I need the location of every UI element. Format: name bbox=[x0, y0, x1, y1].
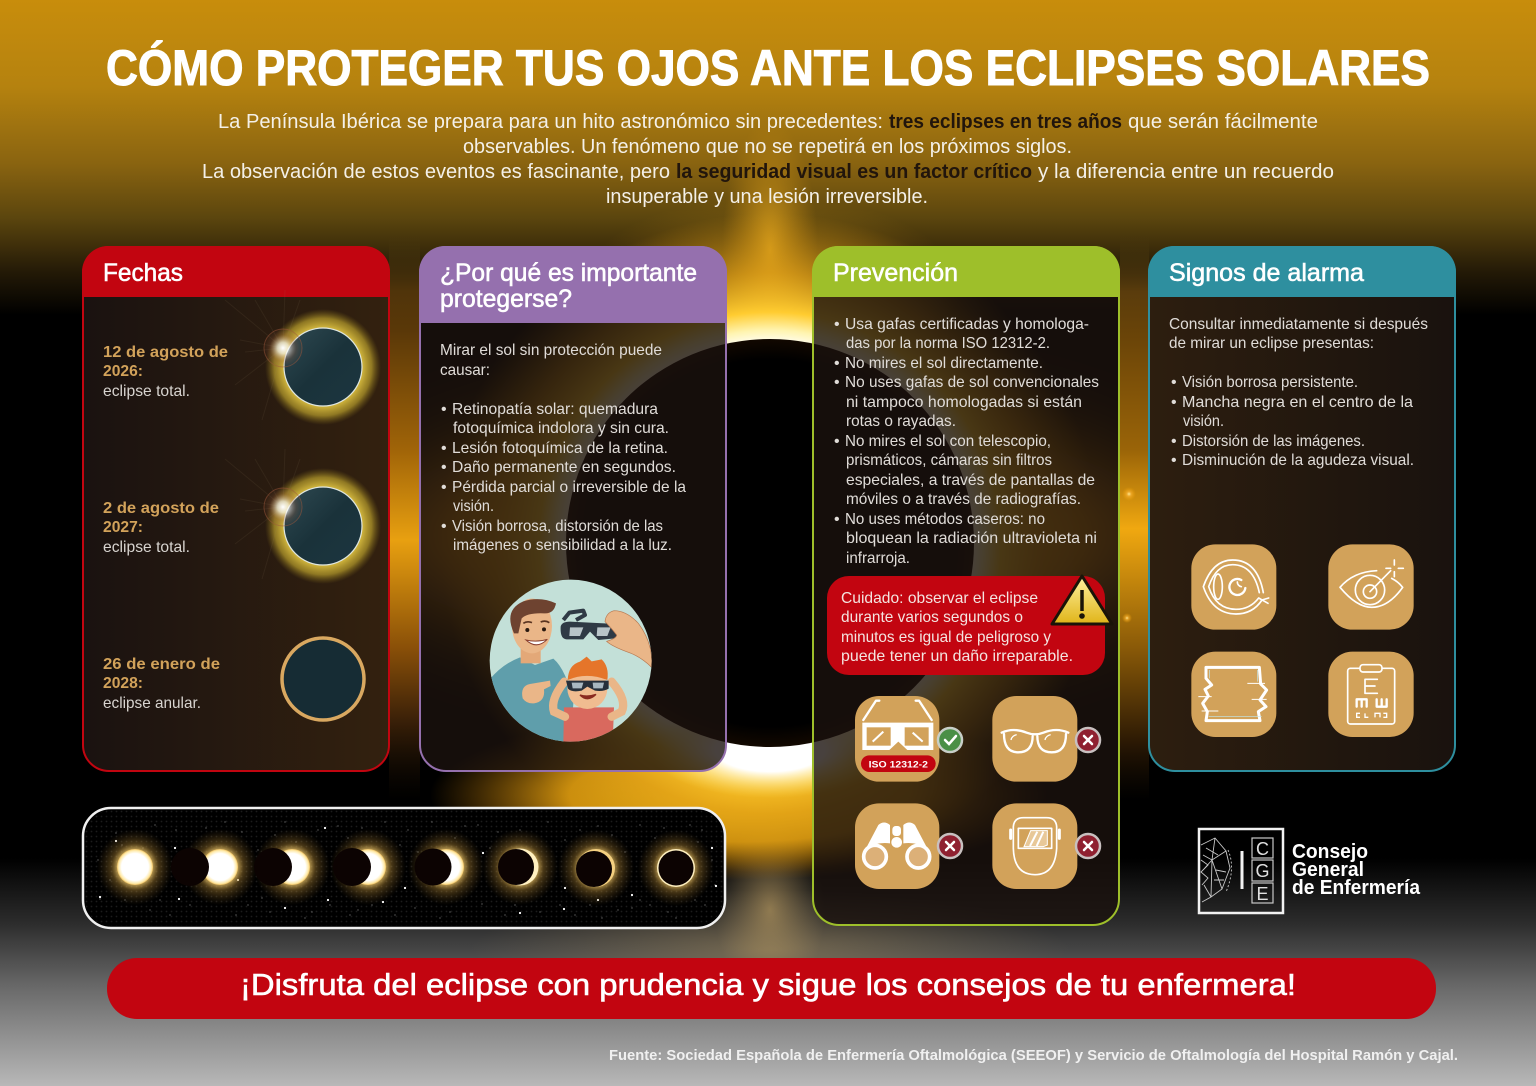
body text: síntomas: • bbox=[1171, 394, 1177, 411]
phase 7 bbox=[558, 830, 634, 906]
date: 2 agosto 2027: eclipse total. bbox=[103, 539, 190, 556]
body text: síntomas: Disminución de la agudeza visual. bbox=[1182, 452, 1414, 469]
body text: riesgos: causar: bbox=[440, 362, 490, 379]
body text: riesgos: Pérdida parcial o irreversible de la bbox=[452, 479, 686, 496]
logo emblem bbox=[1201, 838, 1232, 902]
body text: consejos: • bbox=[834, 374, 840, 391]
body text: síntomas: Visión borrosa persistente. bbox=[1182, 374, 1358, 391]
panel: fechas bbox=[82, 246, 390, 771]
phase 3 bbox=[254, 829, 330, 905]
logo: Consejo General de Enfermería: E bbox=[1256, 884, 1269, 904]
badge: correct bbox=[938, 728, 962, 752]
phase 5 bbox=[408, 829, 484, 905]
body text: consejos: prismáticos, cámaras sin filtros bbox=[846, 452, 1052, 469]
body text: consejos: • bbox=[834, 355, 840, 372]
callout: cuidado: minutos es igual de peligroso y bbox=[841, 629, 1051, 646]
body text: síntomas bbox=[1169, 316, 1428, 469]
eclipse icon: total 2027 bbox=[225, 449, 381, 584]
logo: Consejo General de Enfermería bbox=[1199, 829, 1421, 913]
logo letters bbox=[1252, 838, 1273, 903]
body text: riesgos: • bbox=[441, 518, 447, 535]
date: 2 agosto 2027: 2 de agosto de bbox=[103, 500, 219, 517]
body text: riesgos: imágenes o sensibilidad a la luz. bbox=[453, 537, 672, 554]
panel: prevención bbox=[812, 246, 1120, 925]
icon: welding mask bbox=[992, 803, 1077, 889]
banner: closing message: ¡Disfruta del eclipse con prudencia y sigue los consejos de tu enfermera! bbox=[240, 967, 1296, 1002]
body text: consejos: • bbox=[834, 433, 840, 450]
eclipse phases strip bbox=[83, 808, 725, 928]
phase 2 bbox=[171, 829, 258, 905]
intro text: La observación de estos eventos es fascinante, pero bbox=[202, 161, 670, 183]
date: 2 agosto 2027 bbox=[103, 500, 219, 556]
body text: riesgos: Visión borrosa, distorsión de las bbox=[452, 518, 663, 535]
badge: wrong binoculars bbox=[938, 834, 962, 858]
body text: consejos: ni tampoco homologadas si están bbox=[846, 394, 1082, 411]
header: por qué: ¿Por qué es importante bbox=[440, 259, 697, 287]
intro text: observables. Un fenómeno que no se repetirá en los próximos siglos. bbox=[463, 136, 1072, 158]
body text: riesgos: • bbox=[441, 440, 447, 457]
date: 2 agosto 2027: 2027: bbox=[103, 519, 143, 536]
icon: certified eclipse glasses: ISO 12312-2 bbox=[869, 759, 928, 769]
banner: closing message bbox=[107, 958, 1436, 1019]
icon: eye with laser bbox=[1328, 544, 1414, 630]
callout: cuidado: puede tener un daño irreparable. bbox=[841, 648, 1073, 665]
date: 12 agosto 2026 bbox=[103, 344, 228, 400]
body text: síntomas: visión. bbox=[1183, 413, 1224, 430]
header: por qué: protegerse? bbox=[440, 285, 572, 313]
panel: por qué protegerse bbox=[419, 246, 727, 771]
intro text: insuperable y una lesión irreversible. bbox=[606, 186, 928, 208]
body text: síntomas: • bbox=[1171, 433, 1177, 450]
body text: síntomas: Mancha negra en el centro de la bbox=[1182, 394, 1413, 411]
source note: Fuente: Sociedad Española de Enfermería Oftalmológica (SEEOF) y Servicio de Oftalmología del Hospital Ramón y Cajal. bbox=[609, 1048, 1458, 1064]
body text: consejos: móviles o a través de radiografías. bbox=[846, 491, 1081, 508]
body text: consejos: No uses gafas de sol convencionales bbox=[845, 374, 1099, 391]
header: fechas bbox=[82, 246, 390, 297]
eclipse icon: total 2026 bbox=[225, 290, 381, 425]
icon: certified eclipse glasses bbox=[855, 696, 939, 782]
icon: sunglasses bbox=[992, 696, 1077, 782]
intro text: la seguridad visual es un factor crítico bbox=[676, 161, 1032, 183]
illustration: father and child with eclipse glasses bbox=[487, 580, 652, 750]
body text: riesgos bbox=[440, 342, 686, 554]
body text: síntomas: • bbox=[1171, 452, 1177, 469]
body text: consejos: • bbox=[834, 316, 840, 333]
body text: consejos: No mires el sol con telescopio, bbox=[845, 433, 1051, 450]
body text: consejos: No mires el sol directamente. bbox=[845, 355, 1043, 372]
phase 4 bbox=[330, 829, 406, 905]
body text: consejos: Usa gafas certificadas y homologa- bbox=[845, 316, 1089, 333]
header: signos: Signos de alarma bbox=[1169, 259, 1364, 287]
body text: consejos: especiales, a través de pantallas de bbox=[846, 472, 1095, 489]
date: 12 agosto 2026: 12 de agosto de bbox=[103, 344, 228, 361]
body text: consejos: rotas o rayadas. bbox=[846, 413, 956, 430]
phase 1 bbox=[97, 829, 173, 905]
icon: distorted image bbox=[1191, 652, 1276, 737]
intro text: tres eclipses en tres años bbox=[889, 111, 1122, 133]
intro text: que serán fácilmente bbox=[1128, 111, 1318, 133]
badge: wrong sunglasses bbox=[1076, 728, 1100, 752]
icon: eye anatomy bbox=[1191, 544, 1276, 630]
date: 26 enero 2028: 26 de enero de bbox=[103, 656, 220, 673]
logo: Consejo General de Enfermería: de Enfermería bbox=[1292, 877, 1421, 899]
logo: Consejo General de Enfermería: Consejo bbox=[1292, 841, 1368, 863]
date: 26 enero 2028: eclipse anular. bbox=[103, 695, 201, 712]
header: por qué bbox=[419, 246, 727, 323]
badge: wrong mask bbox=[1076, 834, 1100, 858]
body text: síntomas: Consultar inmediatamente si después bbox=[1169, 316, 1428, 333]
intro text bbox=[202, 111, 1334, 208]
body text: consejos: bloquean la radiación ultravioleta ni bbox=[846, 530, 1097, 547]
header: signos bbox=[1148, 246, 1456, 297]
body text: consejos: das por la norma ISO 12312-2. bbox=[846, 335, 1050, 352]
intro text: La Península Ibérica se prepara para un hito astronómico sin precedentes: bbox=[218, 111, 883, 133]
logo: Consejo General de Enfermería: General bbox=[1292, 859, 1364, 881]
body text: riesgos: Mirar el sol sin protección puede bbox=[440, 342, 662, 359]
logo: Consejo General de Enfermería: C bbox=[1256, 839, 1269, 859]
body text: síntomas: Distorsión de las imágenes. bbox=[1182, 433, 1365, 450]
date: 26 enero 2028 bbox=[103, 656, 220, 712]
eclipse icon: anular 2028 bbox=[282, 638, 364, 720]
logo: Consejo General de Enfermería: G bbox=[1255, 861, 1270, 881]
header: prevención: Prevención bbox=[833, 259, 958, 287]
body text: riesgos: Lesión fotoquímica de la retina. bbox=[452, 440, 668, 457]
body text: riesgos: • bbox=[441, 459, 447, 476]
body text: riesgos: Retinopatía solar: quemadura bbox=[452, 401, 658, 418]
icon: binoculars bbox=[855, 803, 939, 889]
body text: consejos bbox=[834, 316, 1099, 567]
body text: consejos: • bbox=[834, 511, 840, 528]
body text: consejos: infrarroja. bbox=[846, 550, 910, 567]
header: fechas: Fechas bbox=[103, 259, 183, 287]
callout: cuidado: durante varios segundos o bbox=[841, 609, 1023, 626]
date: 12 agosto 2026: 2026: bbox=[103, 363, 143, 380]
body text: riesgos: fotoquímica indolora y sin cura. bbox=[453, 420, 669, 437]
body text: riesgos: • bbox=[441, 401, 447, 418]
icon: eye chart bbox=[1328, 652, 1414, 737]
body text: riesgos: • bbox=[441, 479, 447, 496]
icon: warning triangle bbox=[1052, 576, 1112, 624]
body text: riesgos: visión. bbox=[453, 498, 494, 515]
sun glow and black eclipse disc bbox=[370, 120, 1170, 1010]
stars bbox=[98, 822, 716, 918]
callout: cuidado: Cuidado: observar el eclipse bbox=[841, 590, 1038, 607]
panel: signos de alarma bbox=[1148, 246, 1456, 771]
phase 8 bbox=[638, 830, 714, 906]
body text: síntomas: de mirar un eclipse presentas: bbox=[1169, 335, 1374, 352]
body text: síntomas: • bbox=[1171, 374, 1177, 391]
intro text: y la diferencia entre un recuerdo bbox=[1038, 161, 1334, 183]
phase 6 bbox=[482, 829, 558, 905]
callout: cuidado bbox=[827, 576, 1105, 675]
body text: consejos: No uses métodos caseros: no bbox=[845, 511, 1045, 528]
date: 12 agosto 2026: eclipse total. bbox=[103, 383, 190, 400]
body text: riesgos: Daño permanente en segundos. bbox=[452, 459, 676, 476]
header: prevención bbox=[812, 246, 1120, 297]
date: 26 enero 2028: 2028: bbox=[103, 675, 143, 692]
